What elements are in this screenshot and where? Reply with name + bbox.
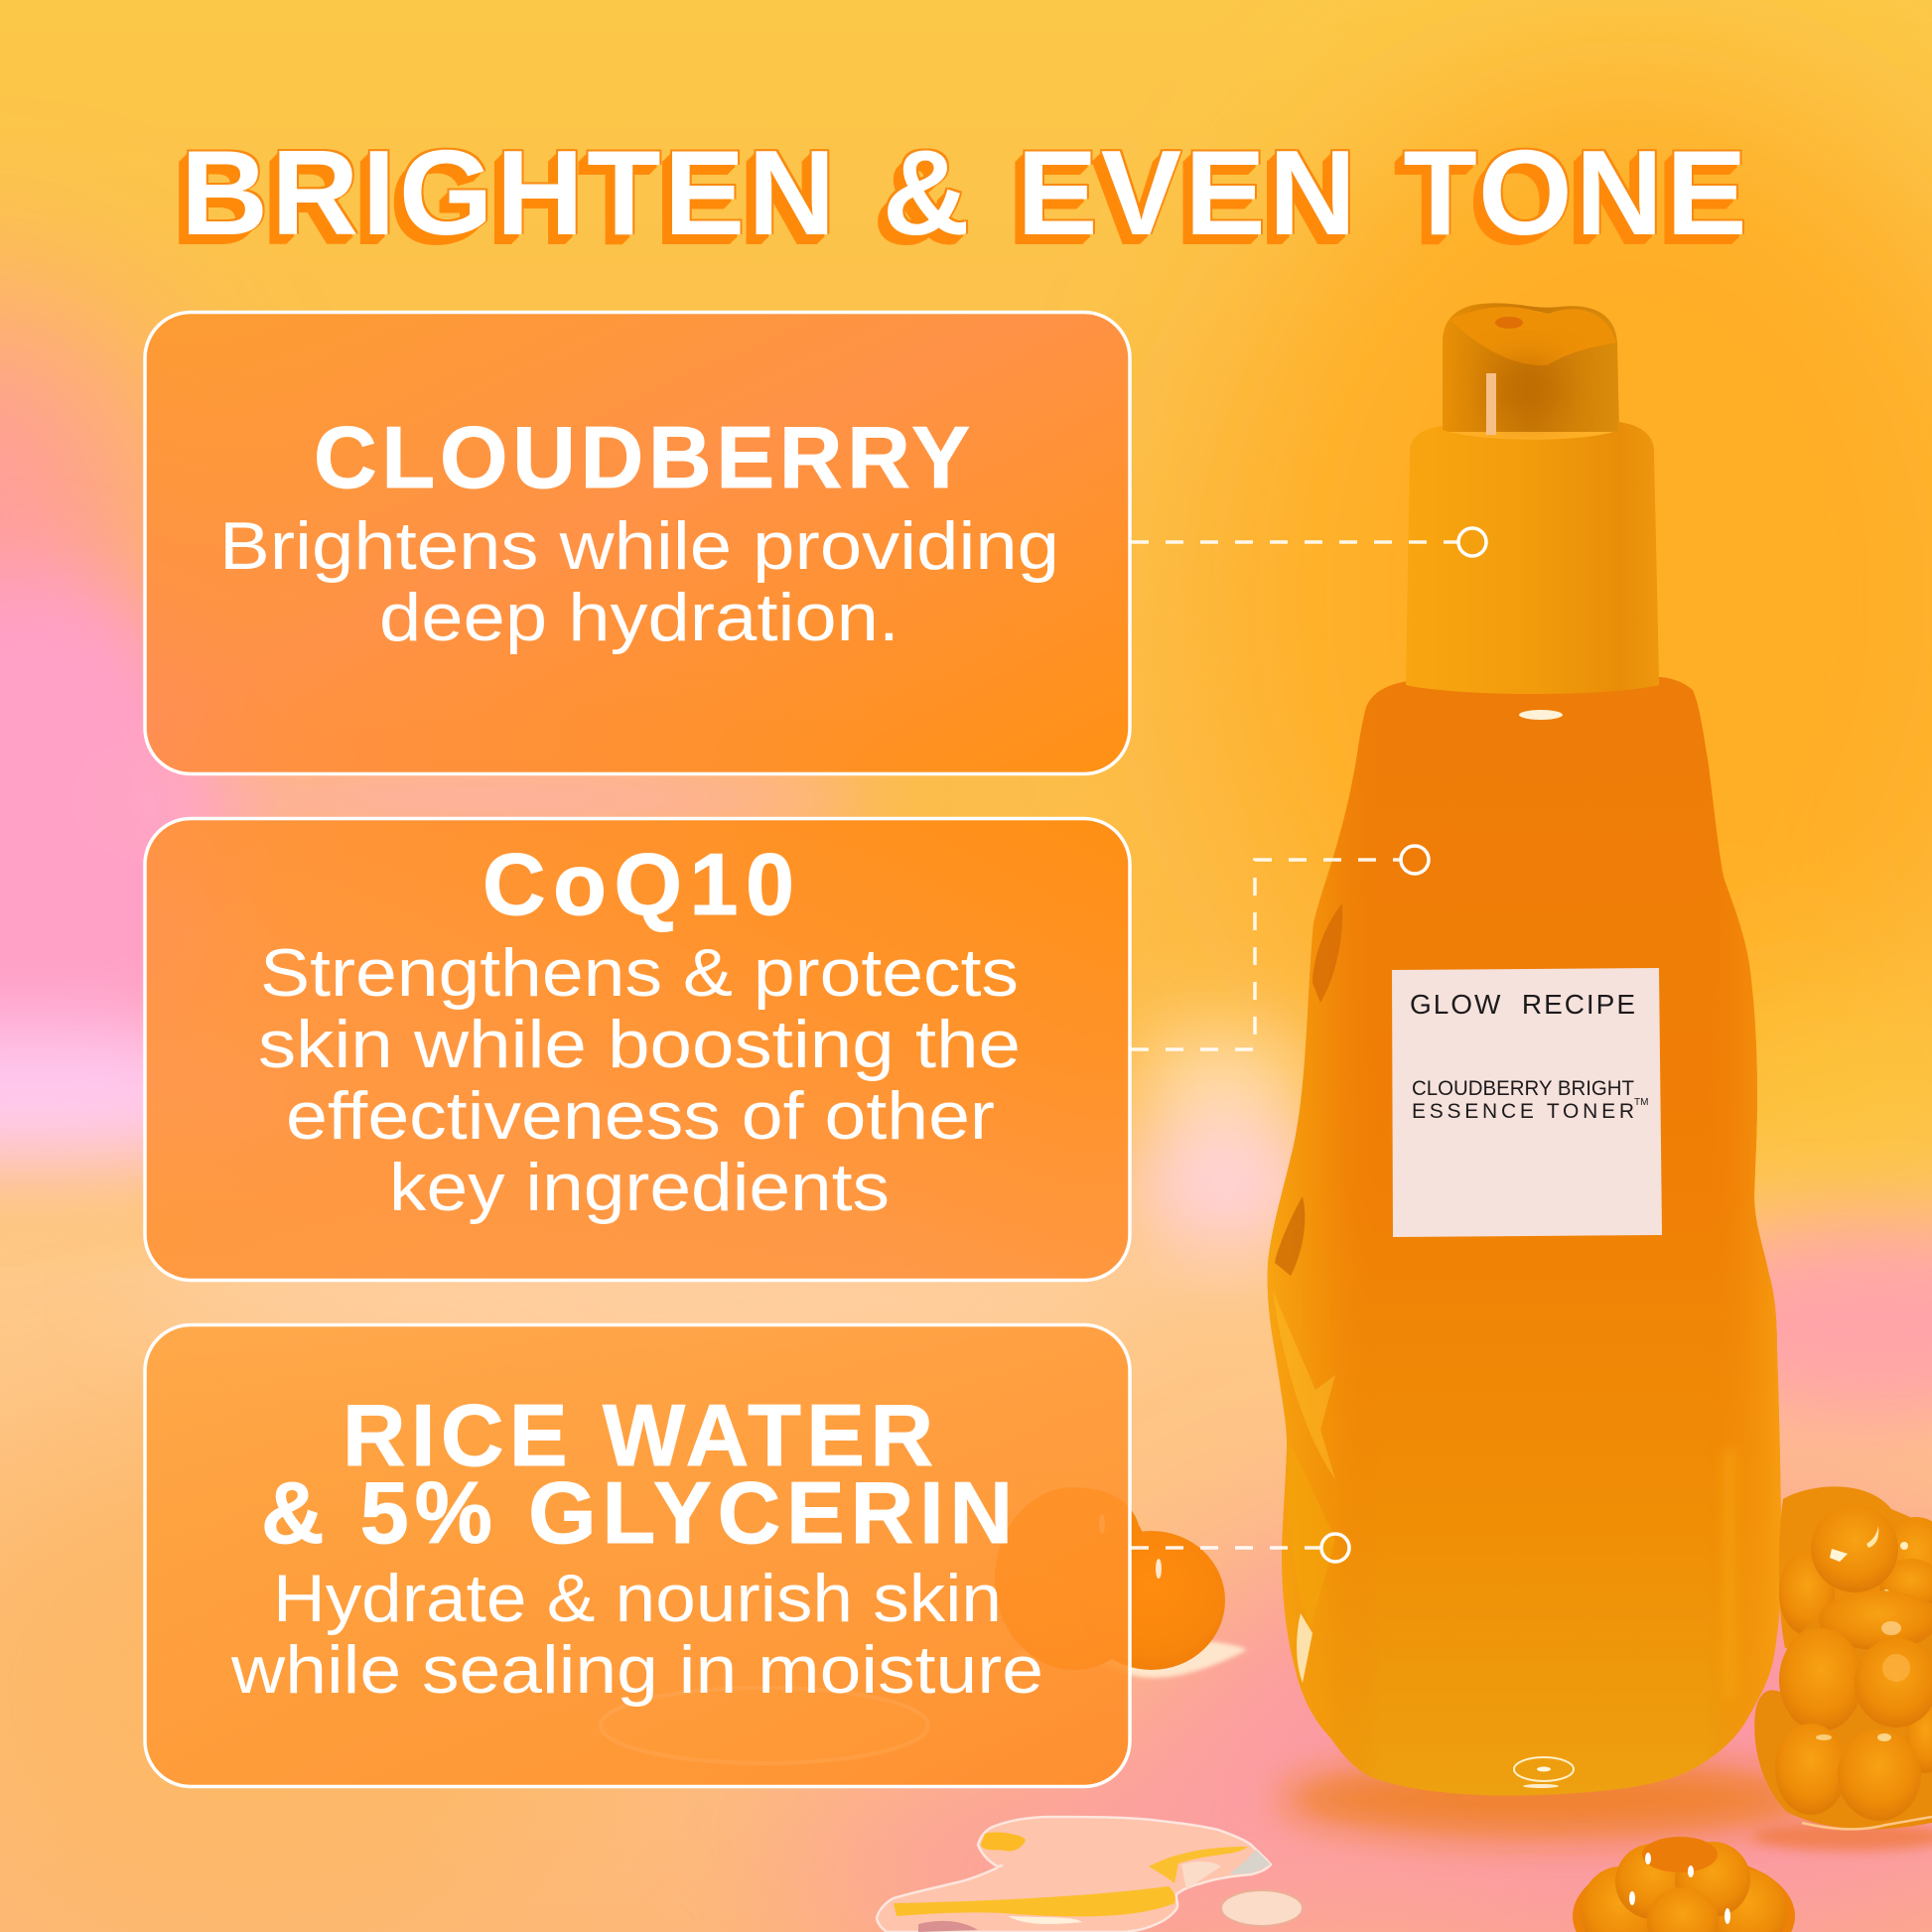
bottle dents and reflections [1273,710,1736,1788]
product label: GLOW RECIPE [1410,989,1635,1020]
bottle collar [1406,422,1659,694]
rice water description: while sealing in moisture [230,1632,1043,1708]
cloudberry heading: CLOUDBERRY [314,408,970,506]
water droplets in the foreground [877,1817,1303,1932]
panel: rice water and glycerin [145,1324,1130,1787]
callout line: rice water to bottle [1131,1534,1349,1562]
small droplet [1221,1890,1303,1926]
product bottle [1268,303,1817,1839]
CoQ10 description: key ingredients [389,1150,890,1225]
cloudberry description [219,508,1059,655]
berries behind the third callout [995,1487,1247,1678]
cloudberry description: deep hydration. [379,580,899,655]
rice water description [230,1561,1043,1708]
product label: ESSENCE TONER [1412,1100,1634,1123]
bottle pump cap [1443,303,1619,435]
rice water heading [261,1386,1013,1562]
CoQ10 description: skin while boosting the [258,1007,1021,1082]
large puddle [877,1817,1271,1932]
panel: cloudberry [145,312,1130,774]
bottle glass edge highlights [1268,677,1782,1796]
CoQ10 description [258,935,1021,1225]
product label [1392,968,1662,1237]
callout line: CoQ10 to bottle [1131,846,1429,1049]
title: BRIGHTEN & EVEN TONE [181,125,1750,260]
bottom berry [1573,1837,1795,1932]
CoQ10 description: effectiveness of other [286,1078,995,1154]
CoQ10 heading: CoQ10 [483,835,794,933]
product label: TM [1634,1097,1648,1108]
callout line: cloudberry to pump [1131,528,1486,556]
rice water heading: & 5% GLYCERIN [261,1463,1013,1562]
cloudberry description: Brightens while providing [219,508,1059,584]
rice water heading: RICE WATER [343,1386,933,1484]
bottle shadow [1281,1759,1817,1839]
water puddle under third panel [601,1688,928,1763]
upper right berry [1779,1486,1932,1648]
bottle body [1268,677,1782,1796]
product label: CLOUDBERRY BRIGHT [1412,1077,1634,1100]
main right berry [1754,1590,1932,1829]
berry shadow [1752,1823,1932,1851]
rice water description: Hydrate & nourish skin [273,1561,1002,1636]
CoQ10 description: Strengthens & protects [260,935,1019,1011]
berry cluster right side [1573,1486,1932,1932]
panel: CoQ10 [145,818,1130,1281]
